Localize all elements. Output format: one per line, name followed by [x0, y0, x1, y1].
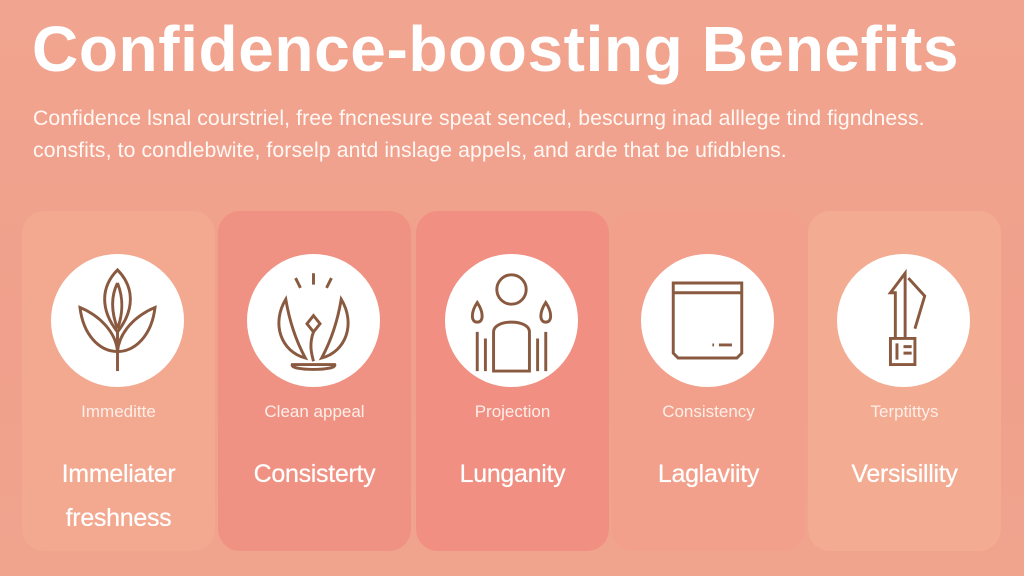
main text: Immeliater [62, 460, 175, 488]
card 3 [416, 211, 609, 551]
main text: Consisterty [254, 460, 375, 488]
main text: Lunganity [460, 460, 565, 488]
title: Confidence-boosting Benefits [32, 13, 959, 85]
card 5 [808, 211, 1001, 551]
label: Clean appeal [264, 402, 365, 421]
icon: person with drops [445, 254, 578, 387]
subtitle text: consfits, to condlebwite, forselp antd inslage appels, and arde that be ufidblens. [33, 139, 787, 162]
main text: Versisillity [851, 460, 958, 488]
icon: leaf [51, 254, 184, 387]
subtitle text [33, 107, 925, 162]
icon: lotus sparkle [247, 254, 380, 387]
card 4 [612, 211, 805, 551]
label: Consistency [662, 402, 755, 421]
label: Immeditte [81, 402, 156, 421]
label: Terptittys [870, 402, 939, 421]
subtitle text: Confidence lsnal courstriel, free fncnesure speat senced, bescurng inad alllege tind figndness. [33, 107, 925, 130]
icon: box [641, 254, 774, 387]
card 2 [218, 211, 411, 551]
label: Projection [475, 402, 550, 421]
icon: hand up [837, 254, 970, 387]
main text [62, 460, 176, 532]
main text: freshness [66, 504, 171, 532]
card 1 [22, 211, 215, 551]
main text: Laglaviity [658, 460, 759, 488]
